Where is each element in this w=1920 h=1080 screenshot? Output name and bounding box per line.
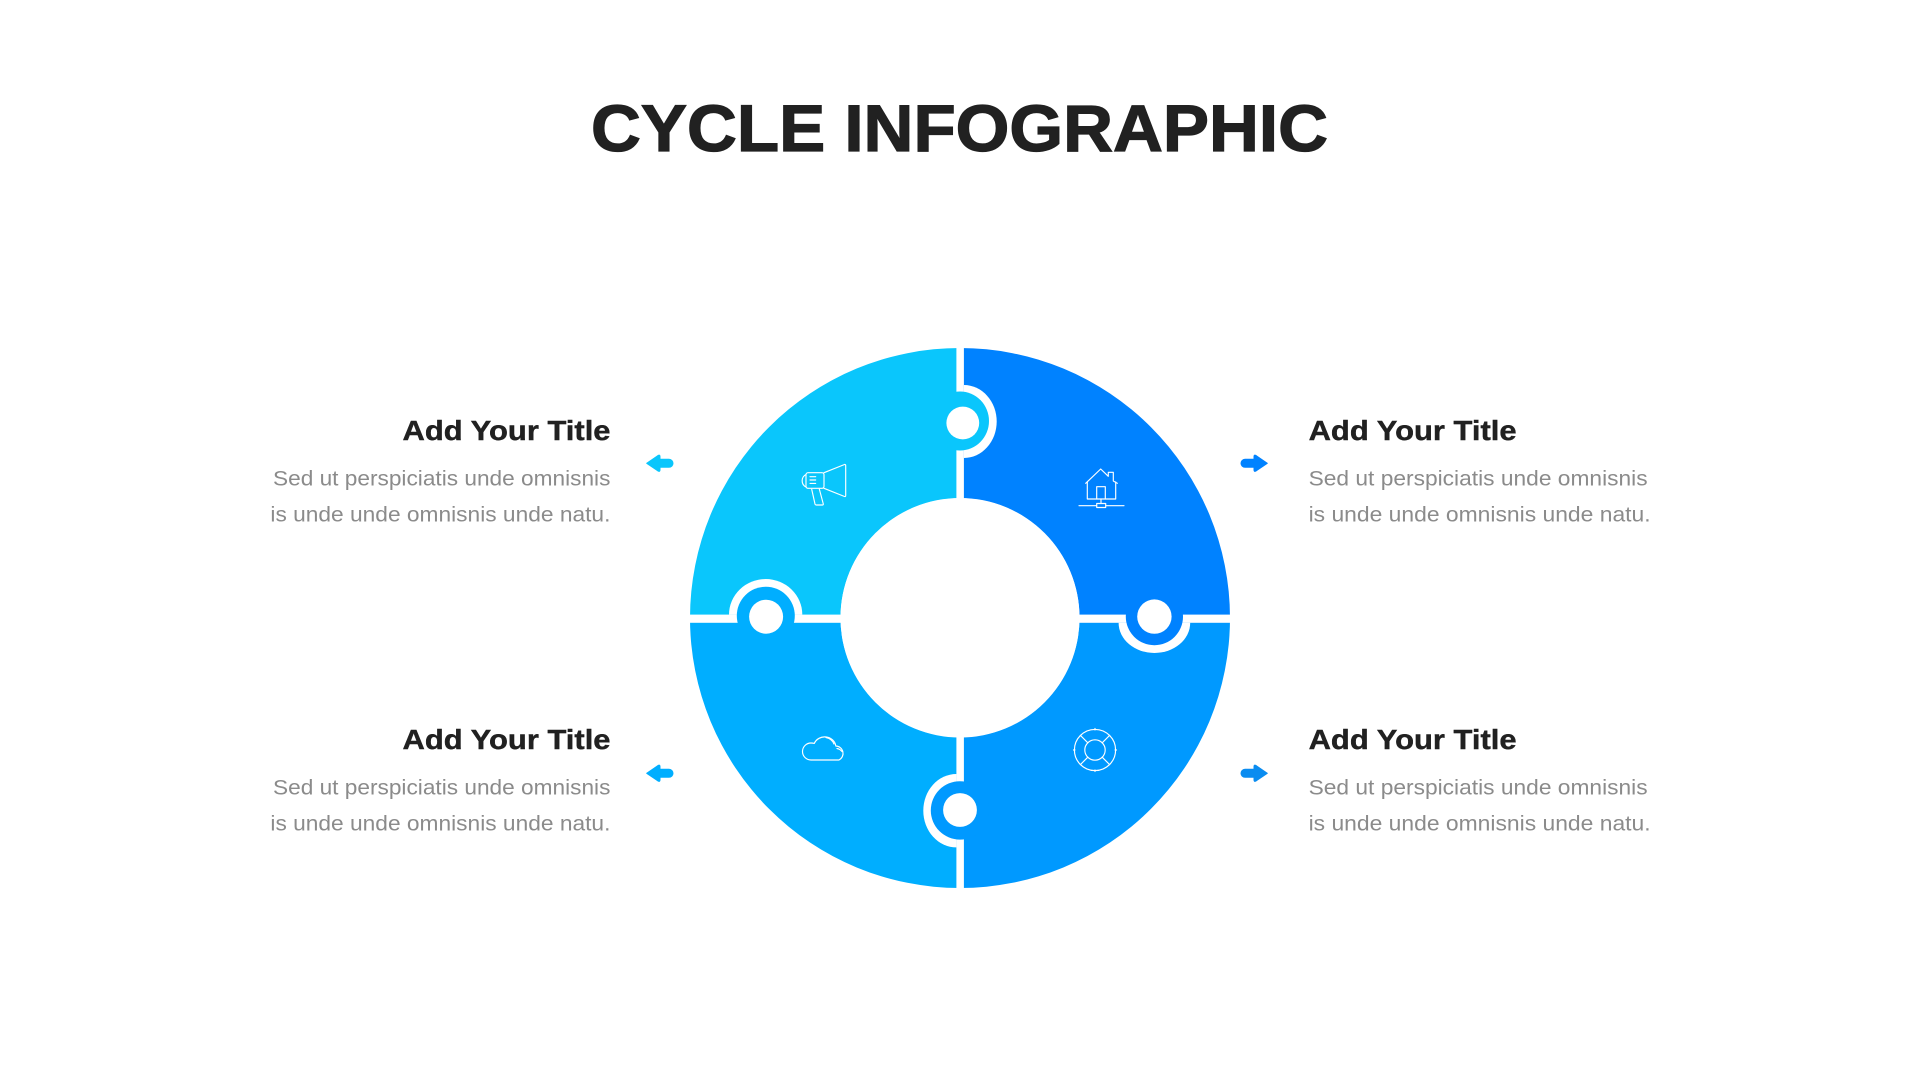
connector: top — [931, 385, 997, 458]
body line: top right 1: Sed ut perspiciatis unde omnisnis — [1309, 468, 1648, 490]
connector: bottom — [923, 774, 989, 847]
puzzle segment: bottom right — [960, 618, 1230, 888]
body line: bottom right 2: is unde unde omnisnis unde natu. — [1309, 812, 1651, 836]
heading: top right: Add Your Title — [1309, 415, 1517, 446]
arrow: bottom right — [1241, 765, 1267, 781]
body line: bottom left 2: is unde unde omnisnis unde natu. — [270, 812, 610, 836]
puzzle segment: top left — [690, 348, 960, 618]
icon: lifebuoy — [1074, 728, 1116, 772]
arrow: bottom left — [647, 765, 673, 781]
puzzle segment: top right — [960, 348, 1230, 618]
icon: cloud — [802, 737, 843, 760]
body line: bottom left 1: Sed ut perspiciatis unde omnisnis — [273, 776, 610, 800]
text block: top right — [1309, 415, 1651, 526]
heading: bottom right: Add Your Title — [1309, 724, 1517, 755]
cycle diagram — [682, 340, 1238, 896]
text block: bottom right — [1309, 724, 1651, 836]
icon: networked house — [1079, 469, 1124, 508]
connector: right — [1119, 588, 1190, 653]
connector: left — [729, 579, 802, 645]
body line: top right 2: is unde unde omnisnis unde natu. — [1309, 504, 1651, 526]
vertical gap — [956, 340, 964, 896]
body line: top left 2: is unde unde omnisnis unde natu. — [270, 504, 610, 526]
arrow: top left — [647, 455, 673, 471]
body line: bottom right 1: Sed ut perspiciatis unde omnisnis — [1309, 776, 1648, 800]
text block: top left — [270, 415, 610, 526]
arrow: top right — [1241, 455, 1267, 471]
centre hole — [840, 498, 1080, 737]
puzzle segment: bottom left — [690, 618, 960, 888]
text block: bottom left — [270, 724, 610, 836]
body line: top left 1: Sed ut perspiciatis unde omnisnis — [273, 468, 610, 490]
horizontal gap — [682, 615, 1238, 623]
icon: megaphone — [802, 464, 846, 505]
heading: top left: Add Your Title — [402, 415, 610, 446]
heading: bottom left: Add Your Title — [402, 724, 610, 755]
title: CYCLE INFOGRAPHIC — [591, 91, 1328, 165]
